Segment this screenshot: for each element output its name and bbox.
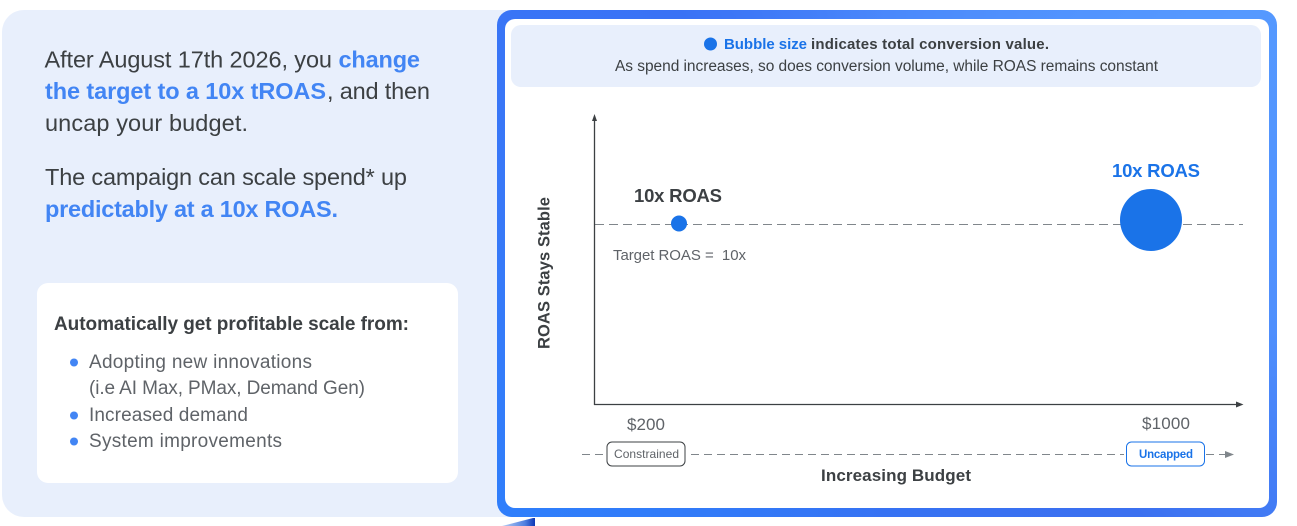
panel: chart gradient frame xyxy=(497,10,1277,517)
chart: ROAS vs budget xyxy=(536,114,1244,434)
text block: predictable scale explanation: predictably at a 10x ROAS. xyxy=(45,196,338,222)
text block: target change explanation: change xyxy=(338,46,420,72)
badge: constrained: Constrained xyxy=(614,447,679,461)
text block: target change explanation xyxy=(44,46,430,136)
tick label $200: $200 xyxy=(627,415,665,434)
panel: profitable scale card xyxy=(37,283,458,483)
heading: profitable scale: Automatically get profitable scale from: xyxy=(54,314,409,335)
budget timeline arrow xyxy=(582,451,1234,458)
large bubble label: 10x ROAS xyxy=(1112,160,1200,181)
badge: uncapped xyxy=(1126,442,1204,466)
badge: constrained xyxy=(607,442,685,466)
small bubble label: 10x ROAS xyxy=(634,185,722,206)
legend: bubble size note: indicates total conversion value. xyxy=(811,36,1049,53)
list: profitable scale sources: (i.e AI Max, PMax, Demand Gen) xyxy=(89,378,365,399)
text block: predictable scale explanation: The campaign can scale spend* up xyxy=(45,164,407,190)
decorative corner sliver xyxy=(502,518,535,526)
badge: uncapped: Uncapped xyxy=(1139,449,1193,461)
y axis label: ROAS Stays Stable xyxy=(536,197,554,349)
text block: target change explanation: After August 17th 2026, you xyxy=(44,46,332,72)
panel: left explanation background xyxy=(2,10,532,517)
panel: chart white card xyxy=(505,19,1269,508)
target ROAS note: Target ROAS = 10x xyxy=(613,247,746,264)
list: profitable scale sources: Increased demand xyxy=(89,405,248,426)
list: profitable scale sources: System improvements xyxy=(89,431,282,452)
panel: bubble size legend banner xyxy=(511,25,1261,87)
x axis arrow xyxy=(594,402,1244,408)
tick label $1000: $1000 xyxy=(1142,414,1190,433)
list: profitable scale sources: Adopting new innovations xyxy=(89,352,312,373)
list: profitable scale sources xyxy=(70,352,365,452)
y axis arrow xyxy=(592,114,597,405)
text block: target change explanation: the target to a 10x tROAS xyxy=(45,78,326,104)
legend: bubble size note: As spend increases, so does conversion volume, while ROAS remains constant xyxy=(615,58,1159,75)
small bubble at $200 xyxy=(671,216,687,232)
text block: target change explanation: , and then xyxy=(327,78,430,104)
legend: bubble size note xyxy=(615,36,1159,75)
text block: target change explanation: uncap your budget. xyxy=(45,110,248,136)
legend: bubble size note: Bubble size xyxy=(724,36,807,53)
large bubble at $1000 xyxy=(1120,189,1182,251)
text block: predictable scale explanation xyxy=(45,164,407,222)
x axis label: Increasing Budget xyxy=(821,466,971,485)
